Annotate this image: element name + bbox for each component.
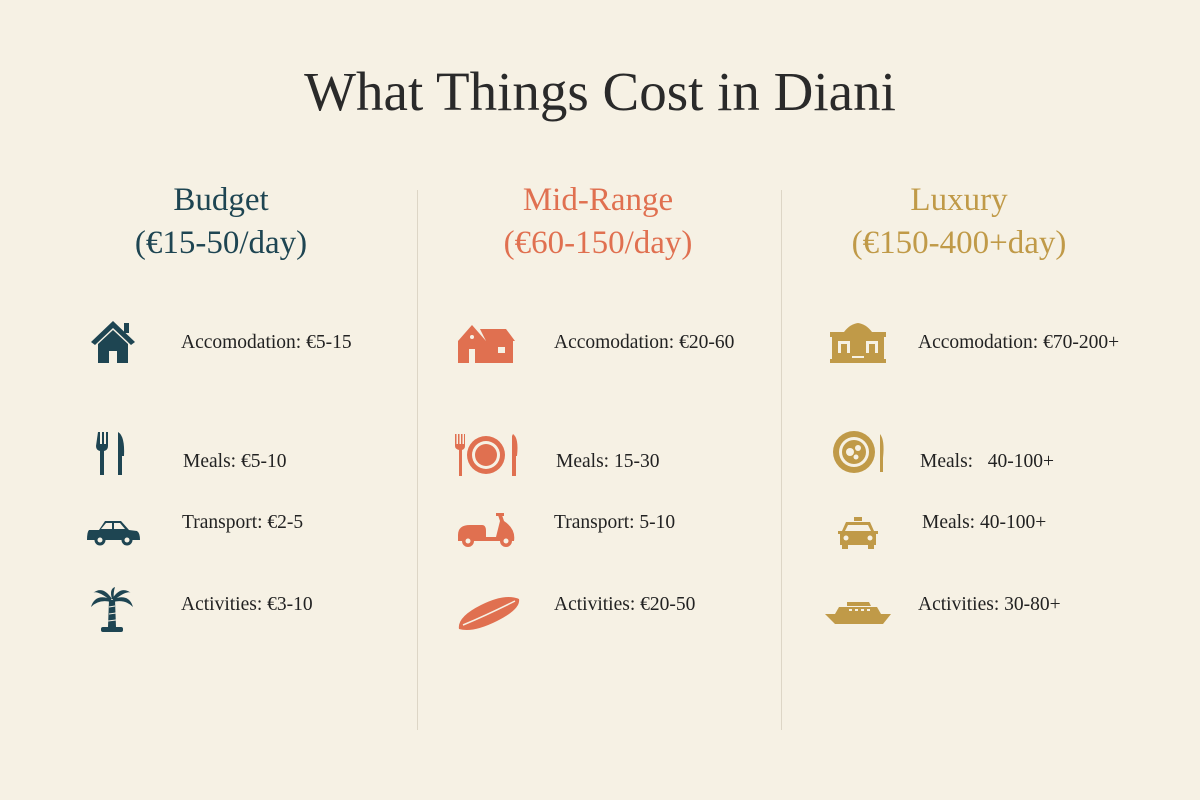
icon: villa luxury xyxy=(830,323,886,363)
heading: budget: (€15-50/day) xyxy=(135,225,307,261)
text: luxury transport: Meals: 40-100+ xyxy=(922,512,1046,533)
heading: budget xyxy=(135,182,307,261)
icon: scooter xyxy=(458,513,514,547)
icon: house mid xyxy=(458,325,515,363)
text: mid accommodation: Accomodation: €20-60 xyxy=(554,332,734,353)
heading: luxury xyxy=(852,182,1066,261)
heading: mid-range xyxy=(504,182,692,261)
title: What Things Cost in Diani xyxy=(304,61,896,122)
icon: surfboard xyxy=(458,597,520,630)
icon: cutlery budget xyxy=(96,432,124,475)
icon: plate mid xyxy=(455,434,518,476)
text: budget accommodation: Accomodation: €5-15 xyxy=(181,332,352,353)
icon: palm xyxy=(91,587,133,632)
icon: yacht xyxy=(825,602,891,624)
text: budget activities: Activities: €3-10 xyxy=(181,594,313,615)
icon: car xyxy=(87,521,140,546)
heading: budget: Budget xyxy=(173,182,269,218)
text: budget transport: Transport: €2-5 xyxy=(182,512,303,533)
heading: luxury: (€150-400+day) xyxy=(852,225,1066,261)
heading: mid-range: Mid-Range xyxy=(523,182,673,218)
text: luxury activities: Activities: 30-80+ xyxy=(918,594,1061,615)
text: mid transport: Transport: 5-10 xyxy=(554,512,675,533)
text: mid meals: Meals: 15-30 xyxy=(556,451,659,472)
text: luxury meals: Meals: 40-100+ xyxy=(920,451,1054,472)
icon: taxi xyxy=(838,517,878,549)
heading: mid-range: (€60-150/day) xyxy=(504,225,692,261)
icon: fine dining xyxy=(833,431,884,473)
text: luxury accommodation: Accomodation: €70-200+ xyxy=(918,332,1119,353)
text: budget meals: Meals: €5-10 xyxy=(183,451,286,472)
icon: house budget xyxy=(91,321,135,363)
text: mid activities: Activities: €20-50 xyxy=(554,594,695,615)
heading: luxury: Luxury xyxy=(910,182,1008,218)
